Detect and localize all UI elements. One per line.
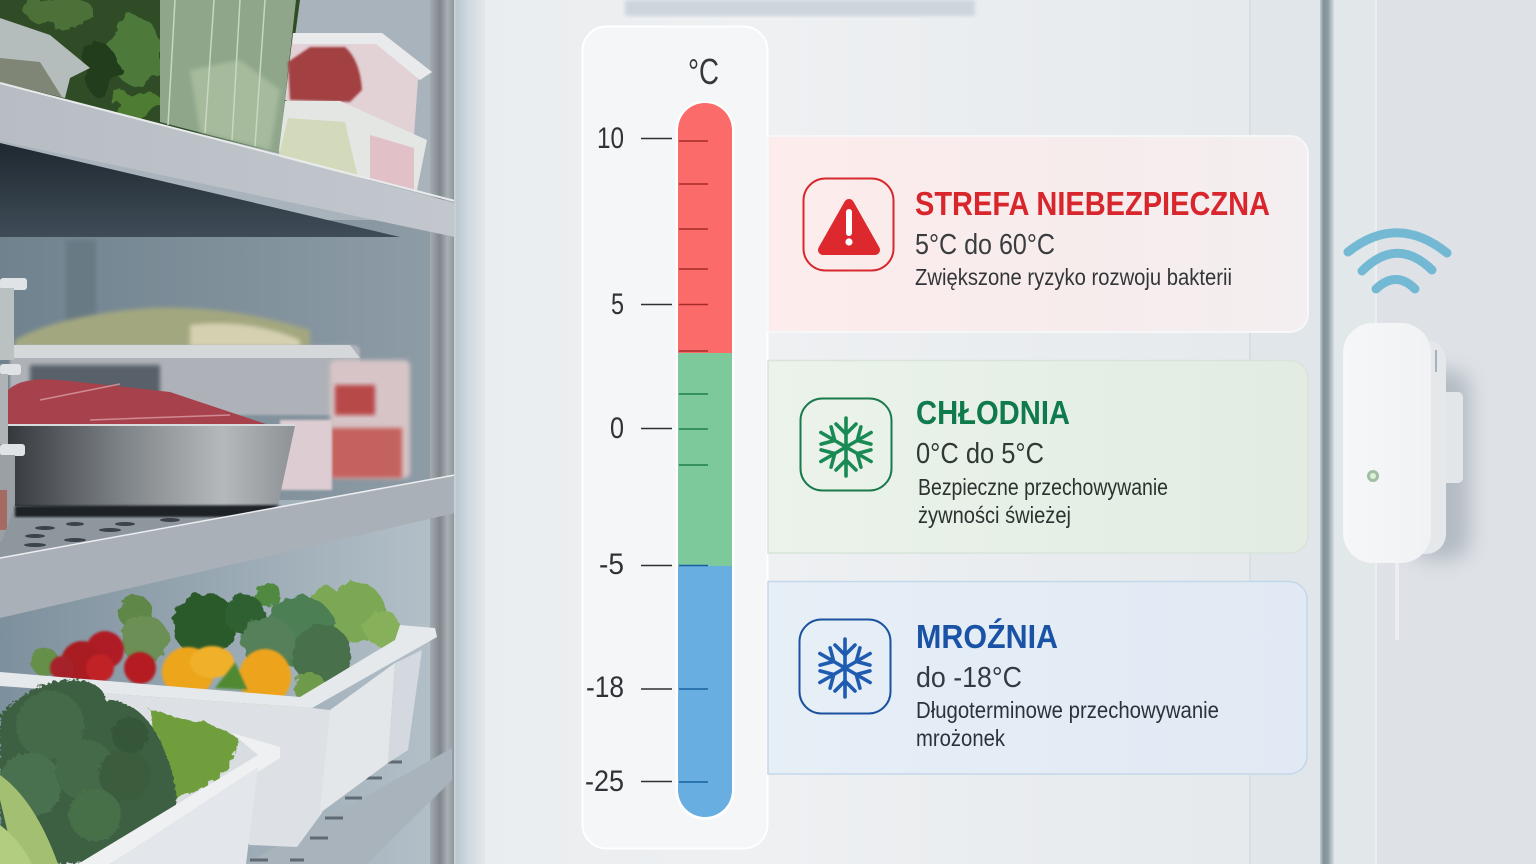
description: mrożonek: [916, 725, 1005, 751]
sensor rear body: [1360, 340, 1446, 554]
photo: open fridge shelves with food: [0, 0, 456, 864]
description: Bezpieczne przechowywanie: [918, 474, 1168, 500]
scale ticks: [641, 138, 672, 782]
icon: blue snowflake: [800, 620, 890, 714]
sensor front body: [1343, 323, 1431, 563]
description: Zwiększone ryzyko rozwoju bakterii: [915, 264, 1232, 290]
status LED: [1367, 470, 1379, 482]
panel: thermometer: [582, 26, 768, 848]
heading: CHŁODNIA: [916, 394, 1070, 431]
panel: chiller zone: [768, 360, 1308, 553]
back-right box with red food: [285, 33, 432, 135]
description: żywności świeżej: [918, 502, 1071, 528]
icon: wifi signal: [1348, 233, 1447, 289]
middle shelf perforated surface and front: [0, 475, 455, 618]
bottom shelf rail: [245, 748, 452, 864]
scale labels: 0: [610, 412, 624, 445]
top shelf front: [0, 83, 455, 237]
scale labels: -18: [586, 671, 624, 704]
icon: green snowflake: [800, 398, 892, 490]
sensor side clip: [1442, 392, 1463, 483]
thermometer tube: [676, 101, 734, 820]
scale labels: -5: [599, 548, 624, 581]
description: Długoterminowe przechowywanie: [916, 697, 1219, 723]
icon: warning triangle: [804, 178, 894, 270]
temperature range: do -18°C: [916, 662, 1022, 694]
heading: STREFA NIEBEZPIECZNA: [915, 185, 1270, 222]
heading: MROŹNIA: [916, 618, 1058, 655]
middle shelf contents: trays and meat: [0, 278, 410, 543]
top shelf contents: leafy greens and boxes: [0, 0, 432, 190]
scale labels: -25: [585, 765, 624, 798]
panel: freezer zone: [768, 582, 1307, 774]
unit label: °C: [688, 51, 719, 92]
description: [916, 697, 1219, 751]
bin 1 with peppers and broccoli: [0, 582, 437, 847]
peppers: [50, 631, 291, 705]
temperature range: 5°C do 60°C: [915, 229, 1055, 261]
panel: danger zone: [768, 136, 1308, 332]
lettuce: [148, 708, 238, 798]
bin 2 with large broccoli: [0, 679, 280, 864]
scale labels: 5: [611, 288, 624, 321]
temperature range: 0°C do 5°C: [916, 438, 1044, 470]
back wall: [0, 0, 456, 864]
description: [918, 474, 1168, 528]
scale labels: 10: [597, 122, 624, 155]
sensor cable: [1395, 560, 1399, 640]
door frame post edge: [454, 0, 456, 864]
broccoli: [0, 679, 177, 864]
front-right boxes: [279, 101, 427, 190]
scale labels: [585, 122, 624, 798]
wireless temperature sensor: [1343, 323, 1470, 640]
